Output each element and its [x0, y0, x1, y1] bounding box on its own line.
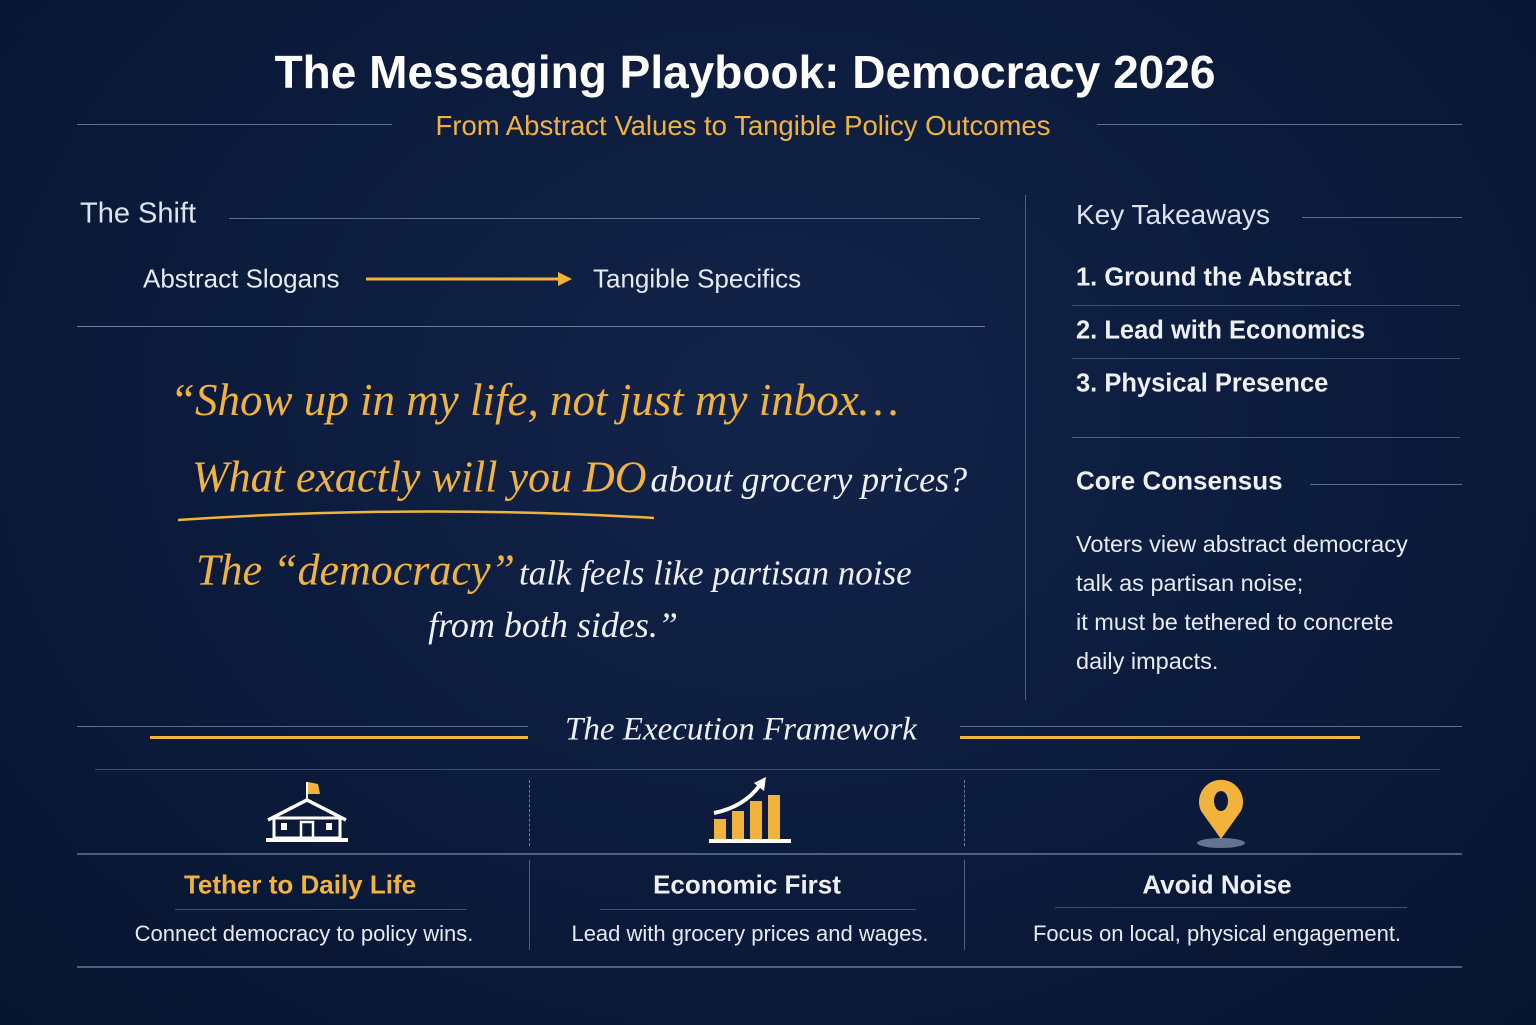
title: Economic First [653, 870, 841, 900]
list: 3. Physical Presence [1076, 370, 1328, 398]
title: Tether to Daily Life [184, 870, 416, 900]
body text [1076, 531, 1408, 674]
list: 1. Ground the Abstract [1076, 264, 1351, 292]
list [1072, 264, 1460, 398]
text: tangible specifics: Tangible Specifics [593, 264, 801, 294]
body text: it must be tethered to concrete [1076, 609, 1393, 635]
text: abstract slogans: Abstract Slogans [143, 264, 340, 294]
heading: core consensus: Core Consensus [1076, 466, 1283, 496]
body text: talk as partisan noise; [1076, 570, 1303, 596]
icon: schoolhouse [266, 782, 348, 842]
panel: key takeaways [1072, 199, 1462, 674]
list: 2. Lead with Economics [1076, 316, 1365, 344]
description: Focus on local, physical engagement. [1033, 921, 1401, 946]
quote: “Show up in my life, not just my inbox… [170, 375, 899, 425]
arrow [366, 272, 572, 286]
icon: location pin [1197, 780, 1245, 848]
quote [170, 375, 967, 645]
description: Lead with grocery prices and wages. [571, 921, 929, 946]
quote: from both sides.” [428, 605, 678, 645]
column: economic first [571, 777, 929, 946]
column: tether to daily life [135, 782, 473, 946]
heading: execution framework: The Execution Framework [565, 712, 917, 748]
icon: bar chart [709, 777, 791, 843]
body text: daily impacts. [1076, 648, 1218, 674]
body text: Voters view abstract democracy [1076, 531, 1408, 557]
quote: The “democracy” talk feels like partisan noise [196, 546, 912, 594]
subtitle: From Abstract Values to Tangible Policy Outcomes [436, 110, 1050, 141]
column: avoid noise [1033, 780, 1407, 946]
heading: key takeaways: Key Takeaways [1076, 199, 1270, 230]
description: Connect democracy to policy wins. [135, 921, 473, 946]
heading: the shift: The Shift [80, 198, 196, 230]
quote: What exactly will you DO about grocery prices? [192, 452, 967, 502]
title: Avoid Noise [1142, 870, 1292, 900]
title: The Messaging Playbook: Democracy 2026 [275, 46, 1215, 98]
panel: the shift [80, 198, 980, 294]
